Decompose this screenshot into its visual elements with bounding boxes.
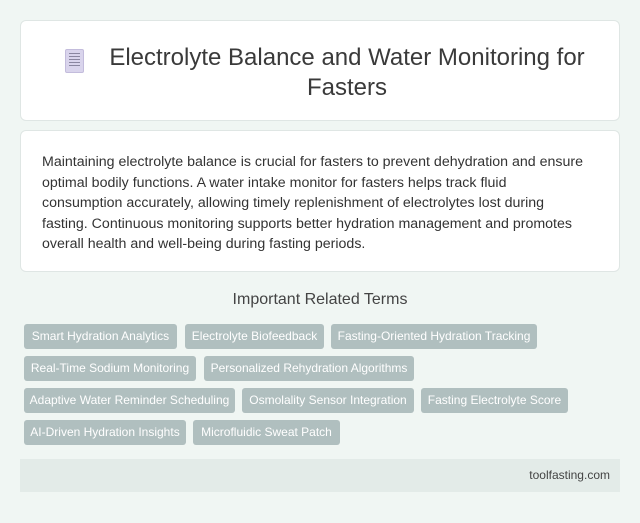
footer (20, 459, 620, 492)
title: Electrolyte Balance and Water Monitoring for Fasters (109, 44, 585, 101)
footer: toolfasting.com (529, 468, 610, 482)
description card (20, 130, 620, 272)
tags: AI-Driven Hydration Insights (30, 425, 180, 439)
tags: Adaptive Water Reminder Scheduling (30, 393, 229, 407)
tags: Fasting Electrolyte Score (428, 393, 561, 407)
description text: consumption accurately, allowing timely replenishment of electrolytes lost during (42, 195, 544, 211)
description text: Maintaining electrolyte balance is crucial for fasters to prevent dehydration and ensure (42, 154, 583, 170)
tags: Electrolyte Biofeedback (192, 329, 317, 343)
title card (20, 20, 620, 121)
tags: Smart Hydration Analytics (32, 329, 169, 343)
tags: Microfluidic Sweat Patch (201, 425, 332, 439)
heading: related terms: Important Related Terms (233, 291, 407, 308)
tags: Personalized Rehydration Algorithms (211, 361, 407, 375)
tags: Fasting-Oriented Hydration Tracking (338, 329, 530, 343)
tags: Real-Time Sodium Monitoring (31, 361, 189, 375)
description text: optimal bodily functions. A water intake monitor for fasters helps track fluid (42, 174, 506, 190)
description text: fasting. Continuous monitoring supports better hydration management and promotes (42, 216, 572, 232)
description text: overall health and well-being during fasting periods. (42, 236, 365, 252)
icon: document (65, 49, 84, 73)
tags: Osmolality Sensor Integration (249, 393, 407, 407)
description text (42, 154, 583, 252)
